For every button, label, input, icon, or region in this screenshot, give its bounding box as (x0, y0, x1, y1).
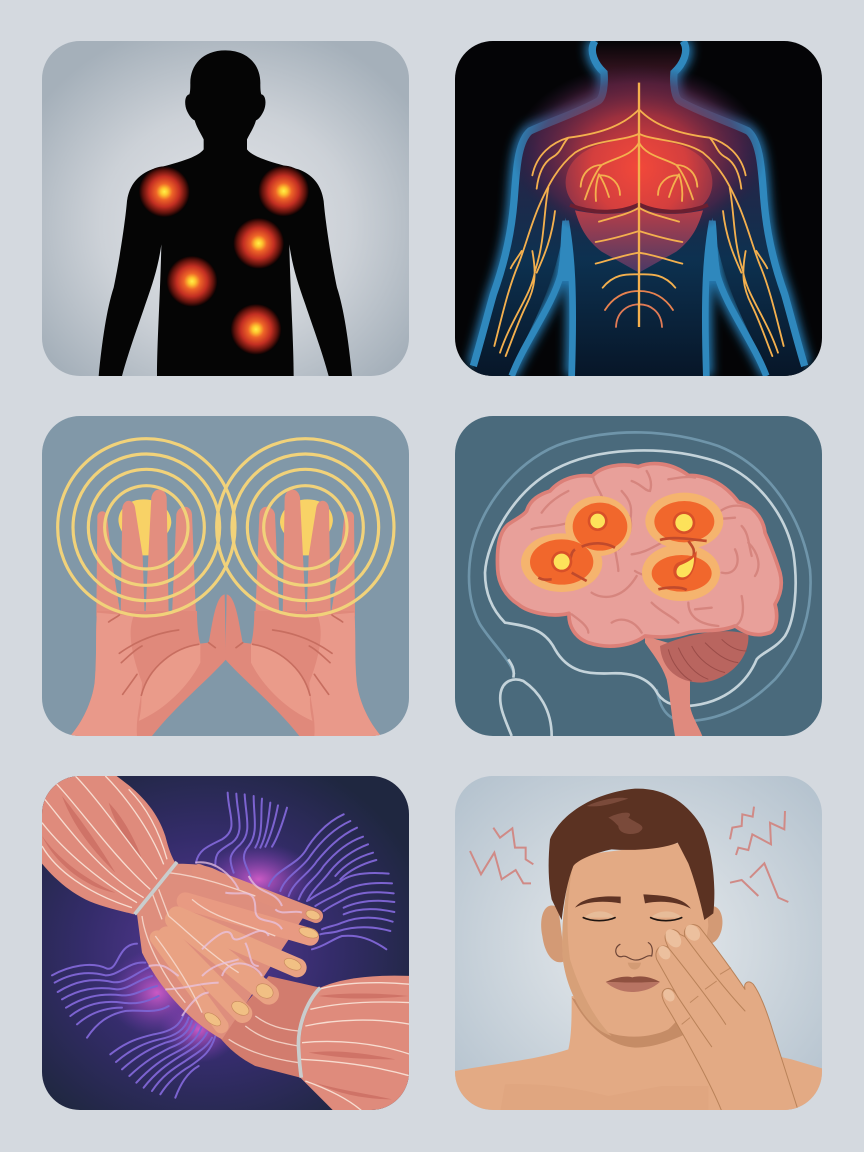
glow (107, 843, 315, 1063)
panel: hand and forearm muscles with nerve waves (39, 773, 412, 1113)
nails (682, 922, 703, 944)
chest glow (516, 70, 762, 227)
right hand art (225, 490, 381, 736)
torso left half art (473, 41, 639, 376)
outer head line (469, 432, 811, 721)
wrist bands (135, 862, 320, 1078)
brain folds (532, 471, 758, 633)
brain stem (645, 636, 702, 736)
waves over hand (149, 862, 302, 1016)
hair (549, 789, 714, 920)
rings (58, 439, 394, 616)
knuckles (682, 968, 731, 1024)
shoulders and neck (455, 996, 825, 1113)
nerves left (494, 109, 639, 356)
lower muscle of hand (219, 976, 320, 1078)
right ear (703, 906, 723, 944)
mouth (606, 976, 660, 992)
finger separators (668, 937, 745, 1047)
torso right half (639, 41, 805, 376)
nose (616, 943, 652, 960)
palm (137, 864, 309, 1039)
hand on cheek (656, 922, 798, 1111)
cerebellum stripes (668, 639, 747, 681)
hair highlights (587, 798, 642, 834)
closed eyes (583, 918, 682, 921)
face shading (562, 863, 612, 1036)
chest muscles right (639, 134, 712, 273)
panel: brain with hot spots (455, 416, 822, 736)
panel: man with facial pain (455, 776, 825, 1113)
zigzag pain marks (470, 807, 788, 902)
pain spots (139, 166, 309, 355)
hot spots (521, 493, 723, 601)
spine (638, 82, 640, 327)
panel: body silhouette with pain points (42, 41, 409, 376)
nerves right (639, 109, 784, 356)
lines on hand (142, 873, 299, 1063)
silhouette (99, 50, 352, 376)
chest muscles left (566, 134, 639, 273)
neck line (500, 659, 552, 736)
left hand art (70, 490, 226, 736)
brain (497, 464, 781, 646)
inner head line (485, 450, 796, 706)
face (562, 843, 708, 1037)
jaw shadow (572, 998, 688, 1048)
eyebrows (575, 894, 691, 909)
panel: nervous system torso (455, 41, 822, 376)
eyelids (584, 911, 682, 918)
lower forearm (299, 976, 412, 1113)
cerebellum (660, 631, 748, 683)
chest shading (500, 1084, 708, 1113)
nails (202, 908, 321, 1029)
nerve waves (52, 793, 394, 1098)
upper forearm (39, 773, 175, 914)
panel: hands with tingling rings (42, 416, 409, 736)
fingers (157, 871, 316, 1026)
left ear (541, 905, 565, 962)
